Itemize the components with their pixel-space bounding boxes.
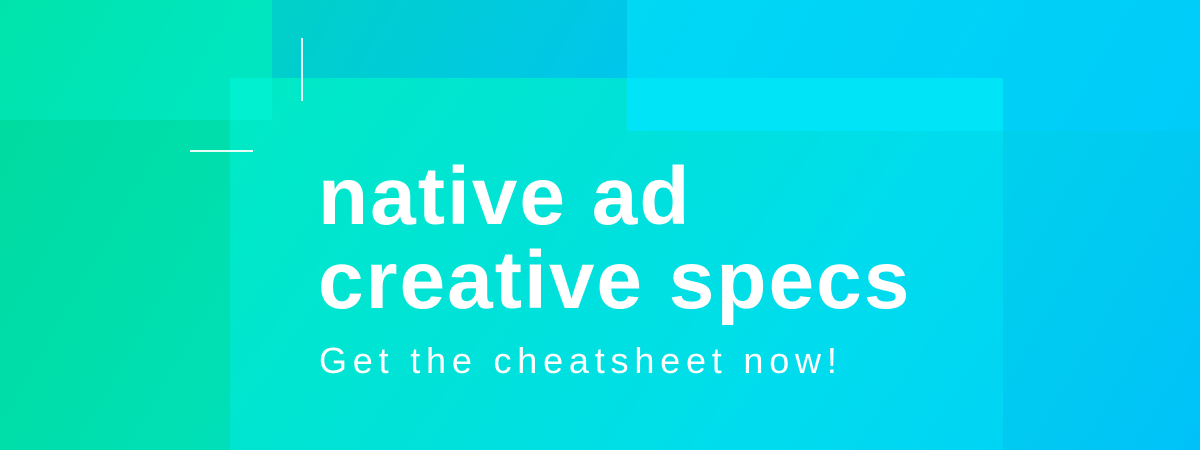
background block: top-left light	[0, 0, 272, 120]
decorative horizontal line	[190, 150, 253, 152]
main panel	[230, 78, 1003, 450]
background block: top-right cyan	[627, 0, 1200, 131]
decorative vertical line	[301, 38, 303, 101]
title	[318, 151, 911, 326]
subtitle: Get the cheatsheet now!	[319, 340, 843, 381]
background block: top dark strip	[272, 0, 627, 78]
title: native ad	[318, 151, 691, 242]
panel top-right overlap highlight	[627, 78, 1003, 131]
panel top-left overlap highlight	[230, 78, 272, 120]
title: creative specs	[318, 235, 911, 326]
